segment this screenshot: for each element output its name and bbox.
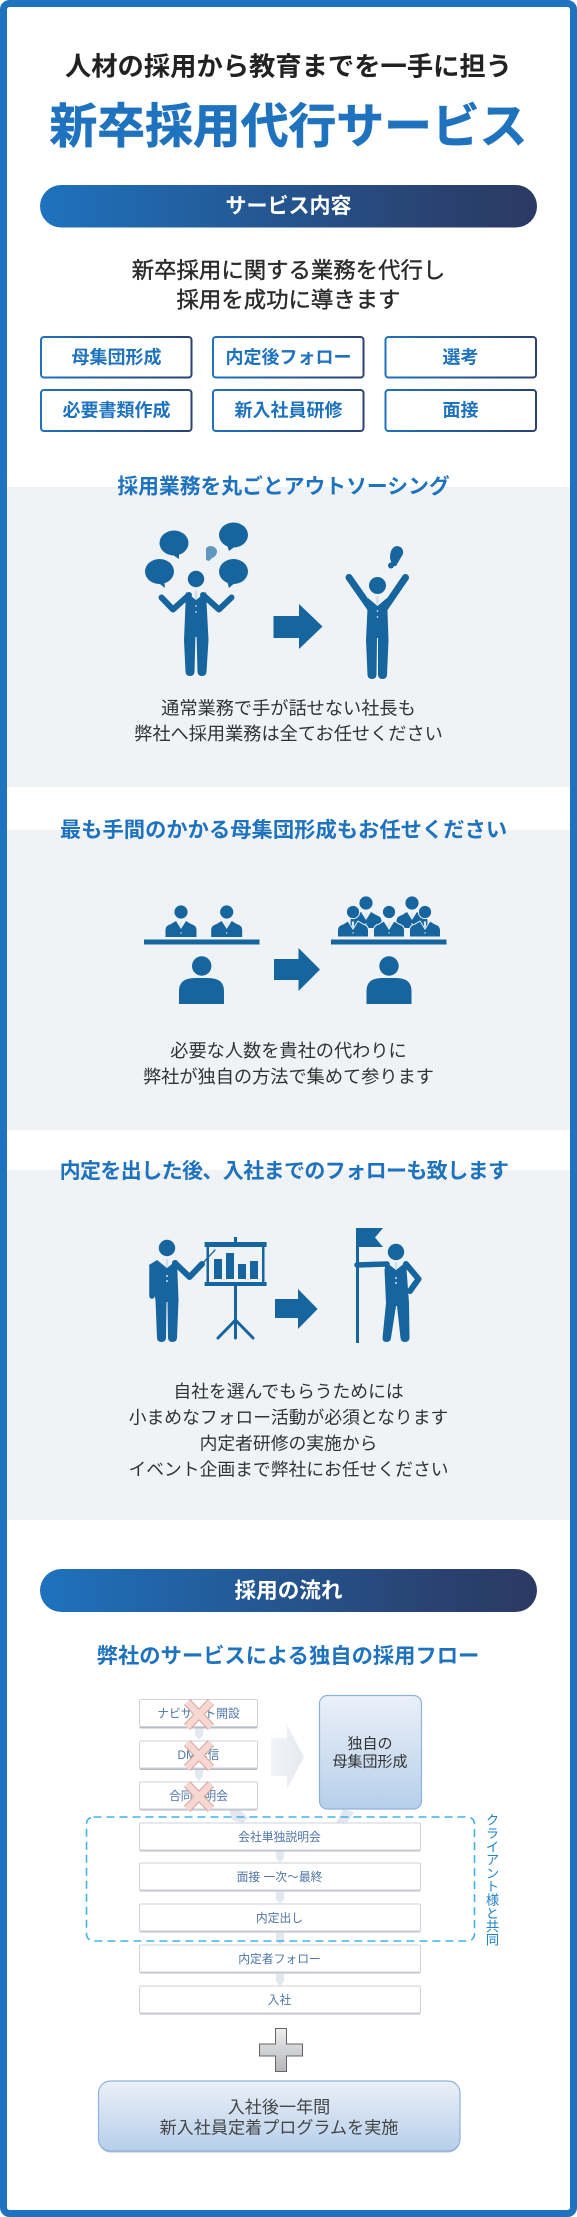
text block: 自社を選んでもらうためには (173, 1382, 404, 1402)
button: new hire training (213, 390, 364, 431)
small connector arrows (195, 1728, 354, 1986)
subtitle: 人材の採用から教育までを一手に担う (65, 52, 512, 82)
button: interview (386, 390, 536, 431)
panel: outsourcing (7, 474, 570, 787)
text block: 弊社が独自の方法で集めて参ります (143, 1067, 434, 1087)
step: navigation site (140, 1700, 258, 1728)
icon: person holding flag (356, 1228, 418, 1343)
section header: service contents (40, 185, 537, 228)
arrow (275, 1289, 318, 1329)
button: interview: 面接 (442, 400, 478, 420)
panel: follow-up (7, 1160, 570, 1520)
button: selection (386, 337, 536, 378)
heading: 採用業務を丸ごとアウトソーシング (117, 474, 450, 498)
heading: 最も手間のかかる母集団形成もお任せください (60, 818, 507, 842)
step: company seminar: 会社単独説明会 (238, 1830, 321, 1844)
arrow (274, 604, 322, 649)
icon: presenter with chart board (149, 1237, 267, 1342)
intro text: 採用を成功に導きます (177, 288, 400, 312)
dashed client area (86, 1817, 474, 1941)
flow heading: 弊社のサービスによる独自の採用フロー (97, 1644, 479, 1668)
icon: busy president with speech bubbles (145, 522, 248, 676)
button: mother population (41, 337, 192, 378)
box: original population building: 独自の (347, 1736, 393, 1752)
step: interviews (140, 1863, 420, 1892)
text block: イベント企画まで弊社にお任せください (128, 1460, 449, 1480)
section header: recruiting flow (40, 1569, 537, 1612)
button: new hire training: 新入社員研修 (234, 400, 342, 420)
box: retention programme: 新入社員定着プログラムを実施 (160, 2118, 398, 2138)
text block: 通常業務で手が話せない社長も (161, 698, 416, 718)
button: post-offer follow: 内定後フォロー (226, 348, 352, 368)
text block: 小まめなフォロー活動が必須となります (129, 1408, 448, 1428)
button: documents: 必要書類作成 (62, 400, 170, 420)
pale arrow (271, 1725, 304, 1789)
step: company seminar (140, 1823, 420, 1852)
panel: population building (7, 818, 570, 1130)
box: original population building (320, 1696, 422, 1809)
section header: recruiting flow: 採用の流れ (235, 1578, 343, 1603)
text block: 必要な人数を貴社の代わりに (170, 1041, 407, 1061)
step: joining: 入社 (268, 1993, 291, 2007)
flow chart (86, 1696, 474, 2152)
step: post-offer follow: 内定者フォロー (238, 1952, 321, 1966)
icon: relieved president with exclamation mark (349, 546, 406, 679)
arrow (274, 948, 320, 991)
icon: many interviewers and candidate (331, 896, 446, 1004)
text block: 内定者研修の実施から (200, 1434, 377, 1454)
box: retention programme: 入社後一年間 (228, 2098, 330, 2117)
main title: 新卒採用代行サービス (50, 101, 527, 154)
heading: 内定を出した後、入社までのフォローも致します (60, 1160, 508, 1183)
step: interviews: 面接 一次〜最終 (237, 1870, 323, 1884)
button: mother population: 母集団形成 (72, 346, 162, 368)
title block (50, 52, 527, 154)
step: job offer: 内定出し (256, 1911, 303, 1925)
box: retention programme (98, 2081, 460, 2152)
step: direct mail (140, 1741, 258, 1770)
button: documents (41, 390, 192, 431)
icon: few interviewers and candidate (144, 905, 260, 1004)
step: post-offer follow (140, 1945, 420, 1974)
red crosses (187, 1702, 211, 1809)
icon: plus (260, 2028, 302, 2072)
section header: service contents: サービス内容 (226, 195, 352, 218)
box: original population building: 母集団形成 (332, 1754, 408, 1770)
button: selection: 選考 (442, 348, 478, 368)
step: joining (140, 1986, 420, 2014)
step: navigation site: ナビサイト開設 (157, 1706, 240, 1720)
vertical label: with client: クライアント様と共同 (484, 1813, 499, 1946)
step: joint seminar: 合同説明会 (169, 1789, 228, 1803)
intro text: 新卒採用に関する業務を代行し (132, 258, 445, 283)
step: job offer (140, 1904, 420, 1932)
step: joint seminar (140, 1782, 258, 1810)
step: direct mail: DM発信 (178, 1748, 220, 1762)
service buttons (41, 337, 536, 431)
text block: 弊社へ採用業務は全てお任せください (134, 724, 443, 744)
button: post-offer follow (213, 337, 364, 378)
